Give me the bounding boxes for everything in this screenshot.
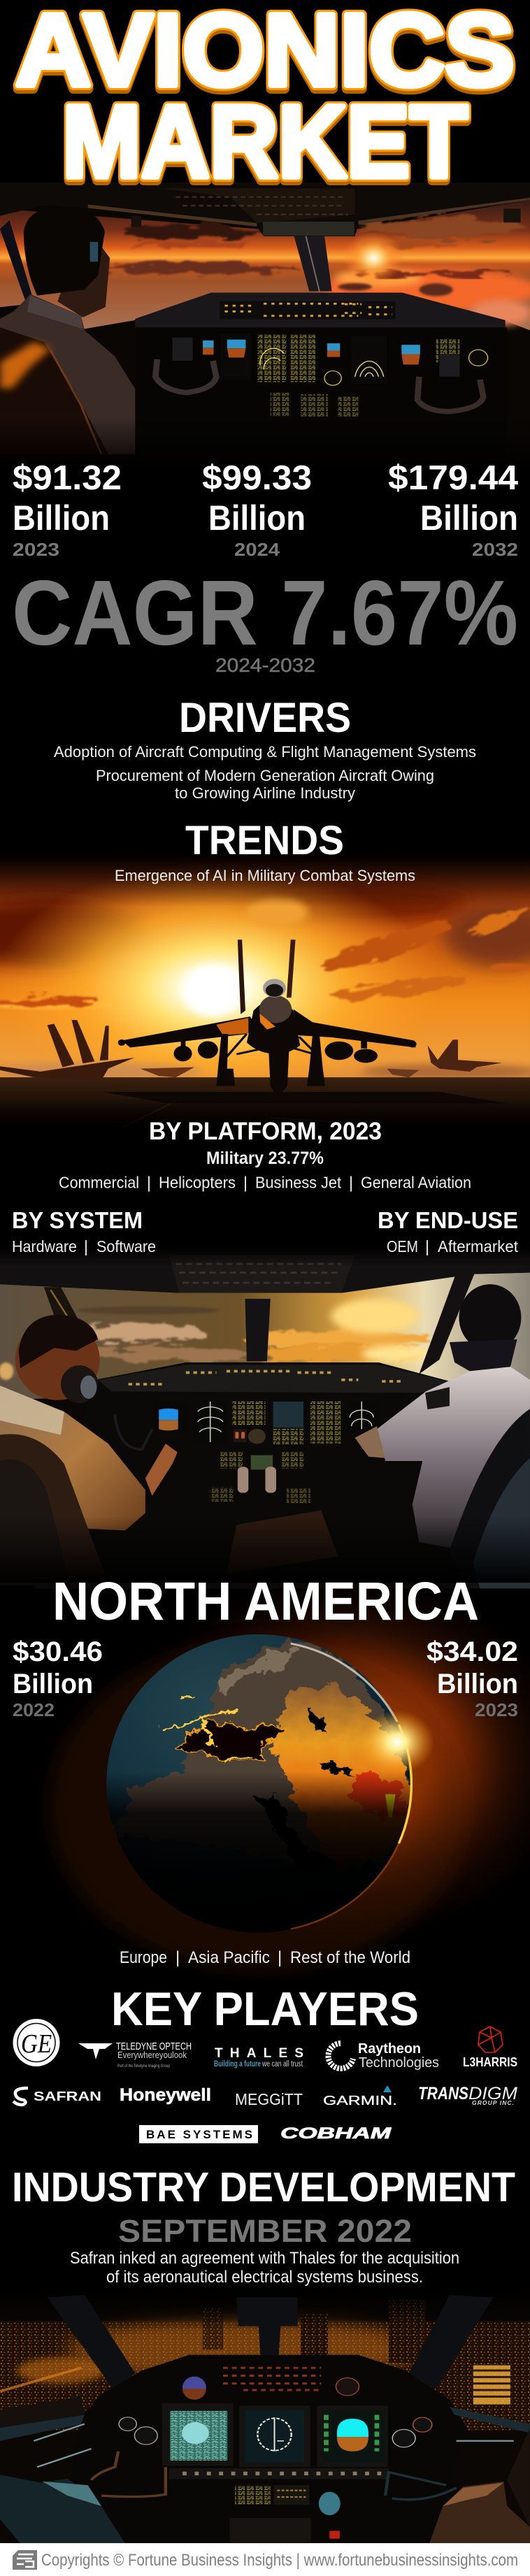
by platform segment [59,1118,471,1191]
image: pilot in cockpit at sunset [0,182,530,473]
logo: Teledyne Optech: Part of the Teledyne Imaging Group [117,2064,170,2068]
by end-use segment: Aftermarket [438,1237,519,1255]
logo: Teledyne Optech: Everywhereyoulook [117,2050,187,2060]
title: MARKET [62,85,468,199]
title: MARKET [62,85,468,199]
logo: Meggitt: MEGGiTT [235,2090,303,2108]
window frames [48,2295,494,2391]
fighter jet silhouette [118,940,417,1098]
logo: GE: GE [21,2029,52,2059]
stat: 2024 market size [202,459,312,560]
title [15,0,515,203]
logo: TransDigm [418,2084,517,2106]
stat: North America 2022: $30.46 [13,1636,103,1667]
other regions: Asia Pacific [188,1948,270,1967]
stat: North America 2023: 2023 [475,1699,518,1720]
by system segment: BY SYSTEM [12,1207,143,1233]
icon: earth globe with sunrise [49,1574,530,1971]
logo: TransDigm: TRANS [418,2084,468,2103]
logo: Safran [13,2088,101,2105]
logo: TransDigm: DIGM [468,2084,517,2103]
drivers heading: DRIVERS [179,694,351,741]
logo: Thales: THALES [215,2046,303,2061]
by end-use segment [378,1207,519,1255]
logo: L3Harris: L3HARRIS [463,2055,517,2069]
stat: 2023 market size: $91.32 [13,459,122,497]
logo: Cobham: COBHAM [280,2124,392,2142]
right pilot [355,1284,530,1588]
by system segment: Software [96,1237,156,1255]
logo: Raytheon Technologies: Raytheon [358,2041,421,2057]
CAGR headline: 2024-2032 [215,654,315,676]
trends heading: TRENDS [185,818,344,863]
by platform segment: | [243,1173,248,1191]
drivers list: to Growing Airline Industry [175,784,356,802]
key players heading: KEY PLAYERS [111,1983,419,2036]
trends item: Emergence of AI in Military Combat Systems [115,867,415,884]
logo: Teledyne Optech [78,2041,192,2068]
other regions: Rest of the World [290,1948,410,1967]
logo: Honeywell: Honeywell [120,2085,211,2105]
console [0,2355,530,2543]
logo: L3Harris [463,2027,517,2069]
stat: 2023 market size [13,459,122,560]
logo: Thales: Building a future [214,2060,261,2068]
other regions: | [278,1948,282,1967]
stat: 2024 market size: Billion [208,498,306,538]
region heading: NORTH AMERICA [52,1571,479,1632]
flight displays [155,333,488,417]
logo: Teledyne Optech: TELEDYNE OPTECH [116,2041,192,2052]
logo: Thales [214,2046,303,2068]
stat: North America 2023: $34.02 [427,1636,518,1667]
stat: North America 2023: Billion [437,1669,518,1699]
by platform segment: Commercial [59,1173,139,1191]
instrument panel [34,1362,507,1588]
stat: North America 2023 [427,1636,518,1720]
glareshield and overhead switches [135,293,507,455]
other regions: Europe [120,1948,167,1967]
logo: Safran: SAFRAN [34,2089,101,2103]
logo: Garmin: GARMIN. [323,2093,397,2108]
logo: Raytheon Technologies: Technologies [359,2055,439,2071]
stat: 2023 market size: Billion [13,498,110,538]
logo: Raytheon Technologies [328,2041,439,2071]
stat: 2024 market size: $99.33 [202,459,312,497]
drivers list: Adoption of Aircraft Computing & Flight Management Systems [54,743,476,761]
seats [0,2428,530,2543]
other regions [120,1948,410,1967]
stat: 2032 market size [388,459,518,560]
image: two pilots in cockpit [0,1246,530,1588]
background aircraft [0,1020,502,1080]
development date: SEPTEMBER 2022 [118,2213,412,2249]
drivers list [54,743,476,802]
image: fighter jet at sunset [0,854,530,1132]
by platform segment: Helicopters [159,1173,236,1191]
logo: Garmin [323,2085,397,2108]
development description: Safran inked an agreement with Thales for the acquisition [70,2249,459,2268]
logo: TransDigm: GROUP INC. [472,2099,514,2106]
stat: 2032 market size: 2032 [472,539,518,560]
stat: North America 2022 [13,1636,103,1720]
by platform segment: Business Jet [255,1173,342,1191]
by system segment: | [84,1237,88,1255]
other regions: | [176,1948,180,1967]
stat: 2023 market size: 2023 [13,539,59,560]
by platform segment: General Aviation [361,1173,471,1191]
pilot seat [0,327,108,454]
drivers list: Procurement of Modern Generation Aircraft Owing [96,767,434,784]
stat: 2032 market size: $179.44 [388,459,518,497]
by end-use segment: OEM [387,1237,418,1255]
by platform segment: BY PLATFORM, 2023 [149,1118,382,1145]
logo: BAE Systems [139,2125,258,2143]
by end-use segment: BY END-USE [378,1207,518,1233]
industry development heading: INDUSTRY DEVELOPMENT [12,2164,515,2210]
by platform segment: Military 23.77% [206,1149,324,1168]
footer: copyright bar [0,2543,530,2576]
pilot figure [0,206,230,454]
logo: GE [13,2019,60,2066]
logo: BAE Systems: BAE SYSTEMS [146,2128,252,2141]
development description [70,2249,459,2287]
by system segment [12,1207,156,1255]
title: MARKET [62,88,468,203]
image: helicopter cockpit over night city [0,2289,530,2543]
development description: of its aeronautical electrical systems business. [106,2268,423,2287]
left pilot [0,1315,178,1583]
by platform segment: | [349,1173,353,1191]
stat: 2032 market size: Billion [420,498,518,538]
by system segment: Hardware [12,1237,77,1255]
logo: Thales: we can all trust [262,2060,303,2068]
by platform segment: | [147,1173,151,1191]
stat: 2024 market size: 2024 [234,539,280,560]
stat: North America 2022: 2022 [13,1699,55,1720]
stat: North America 2022: Billion [13,1669,93,1699]
by end-use segment: | [425,1237,429,1255]
